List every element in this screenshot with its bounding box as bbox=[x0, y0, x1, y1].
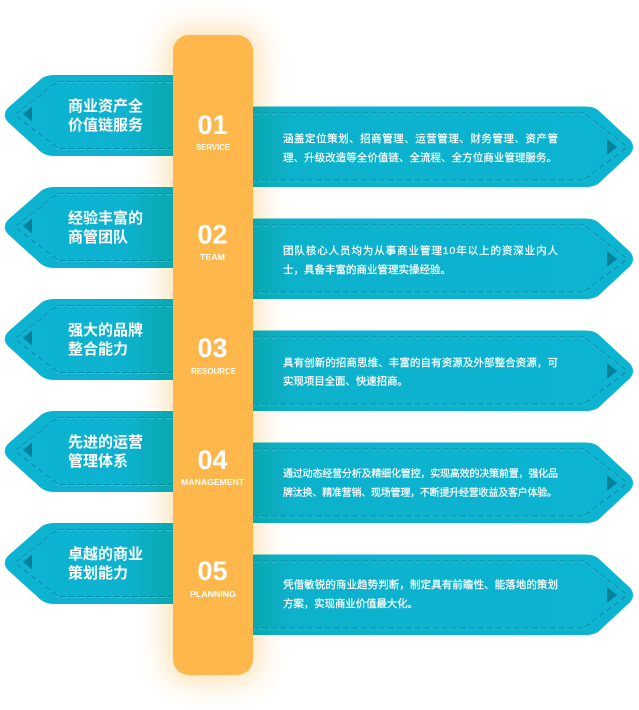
heading: 先进的运营管理体系: 先进的运营 bbox=[68, 433, 143, 451]
icon: left triangle bbox=[23, 554, 32, 570]
description 03: 实现项目全面、快速招商。 bbox=[283, 374, 408, 388]
description 02: 士，具备丰富的商业管理实操经验。 bbox=[283, 263, 451, 276]
heading: 卓越的商业策划能力: 卓越的商业 bbox=[68, 545, 143, 563]
icon: left triangle bbox=[23, 218, 32, 234]
description 02 bbox=[283, 244, 558, 276]
heading: 先进的运营管理体系: 管理体系 bbox=[68, 452, 128, 470]
right tag 03 bbox=[253, 330, 633, 411]
icon: right triangle bbox=[607, 139, 617, 155]
heading: 经验丰富的商管团队: 商管团队 bbox=[68, 228, 128, 246]
icon: right triangle bbox=[607, 251, 617, 267]
right tag 04 bbox=[253, 442, 633, 523]
description 04: 通过动态经营分析及精细化管控，实现高效的决策前置，强化品 bbox=[283, 467, 558, 480]
description 03 bbox=[283, 356, 558, 388]
heading: 商业资产全价值链服务: 商业资产全 bbox=[68, 97, 143, 115]
step 04 number and label: 04 bbox=[197, 445, 228, 475]
left tag 05 bbox=[5, 523, 173, 604]
step 04 number and label: MANAGEMENT bbox=[181, 478, 244, 487]
step 02 number and label: 02 bbox=[197, 220, 228, 250]
description 01: 理、升级改造等全价值链、全流程、全方位商业管理服务。 bbox=[283, 151, 557, 164]
icon: left triangle bbox=[23, 106, 32, 122]
description 05: 凭借敏锐的商业趋势判断，制定具有前瞻性、能落地的策划 bbox=[283, 578, 558, 591]
description 05: 方案，实现商业价值最大化。 bbox=[283, 597, 418, 610]
step 02 number and label: TEAM bbox=[200, 253, 225, 262]
step 03 number and label: 03 bbox=[197, 333, 228, 363]
step 01 number and label bbox=[196, 110, 231, 152]
heading: 经验丰富的商管团队: 经验丰富的 bbox=[68, 209, 143, 227]
step 04 number and label bbox=[181, 445, 244, 487]
step 03 number and label bbox=[191, 333, 237, 376]
left tag 01 bbox=[5, 75, 173, 156]
heading: 商业资产全价值链服务: 价值链服务 bbox=[68, 116, 143, 134]
right tag 02 bbox=[253, 218, 633, 299]
heading: 强大的品牌整合能力: 整合能力 bbox=[68, 340, 128, 358]
step 03 number and label: RESOURCE bbox=[191, 367, 237, 376]
pillar glow bbox=[166, 28, 260, 682]
step 01 number and label: SERVICE bbox=[196, 143, 231, 152]
description 03: 具有创新的招商思维、丰富的自有资源及外部整合资源，可 bbox=[283, 356, 558, 369]
left tag 04 bbox=[5, 411, 173, 492]
description 01 bbox=[283, 132, 558, 164]
step 05 number and label bbox=[190, 556, 236, 599]
step 01 number and label: 01 bbox=[197, 110, 228, 140]
icon: left triangle bbox=[23, 442, 32, 458]
description 05 bbox=[283, 578, 558, 610]
icon: right triangle bbox=[607, 363, 617, 379]
description 04: 牌汰换、精准营销、现场管理，不断提升经营收益及客户体验。 bbox=[283, 486, 557, 499]
icon: right triangle bbox=[607, 587, 617, 603]
heading: 强大的品牌整合能力: 强大的品牌 bbox=[68, 321, 143, 339]
orange central pillar bbox=[173, 35, 253, 675]
description 01: 涵盖定位策划、招商管理、运营管理、财务管理、资产管 bbox=[283, 132, 558, 145]
heading: 卓越的商业策划能力: 策划能力 bbox=[68, 564, 128, 582]
left tag 03 bbox=[5, 299, 173, 380]
description 04 bbox=[283, 467, 558, 499]
right tag 05 bbox=[253, 554, 633, 635]
left tag 02 bbox=[5, 187, 173, 268]
step 05 number and label: PLANNING bbox=[190, 590, 236, 599]
right tag 01 bbox=[253, 106, 633, 187]
step 05 number and label: 05 bbox=[197, 556, 228, 586]
description 02: 团队核心人员均为从事商业管理10年以上的资深业内人 bbox=[283, 244, 558, 257]
icon: left triangle bbox=[23, 330, 32, 346]
icon: right triangle bbox=[607, 475, 617, 491]
